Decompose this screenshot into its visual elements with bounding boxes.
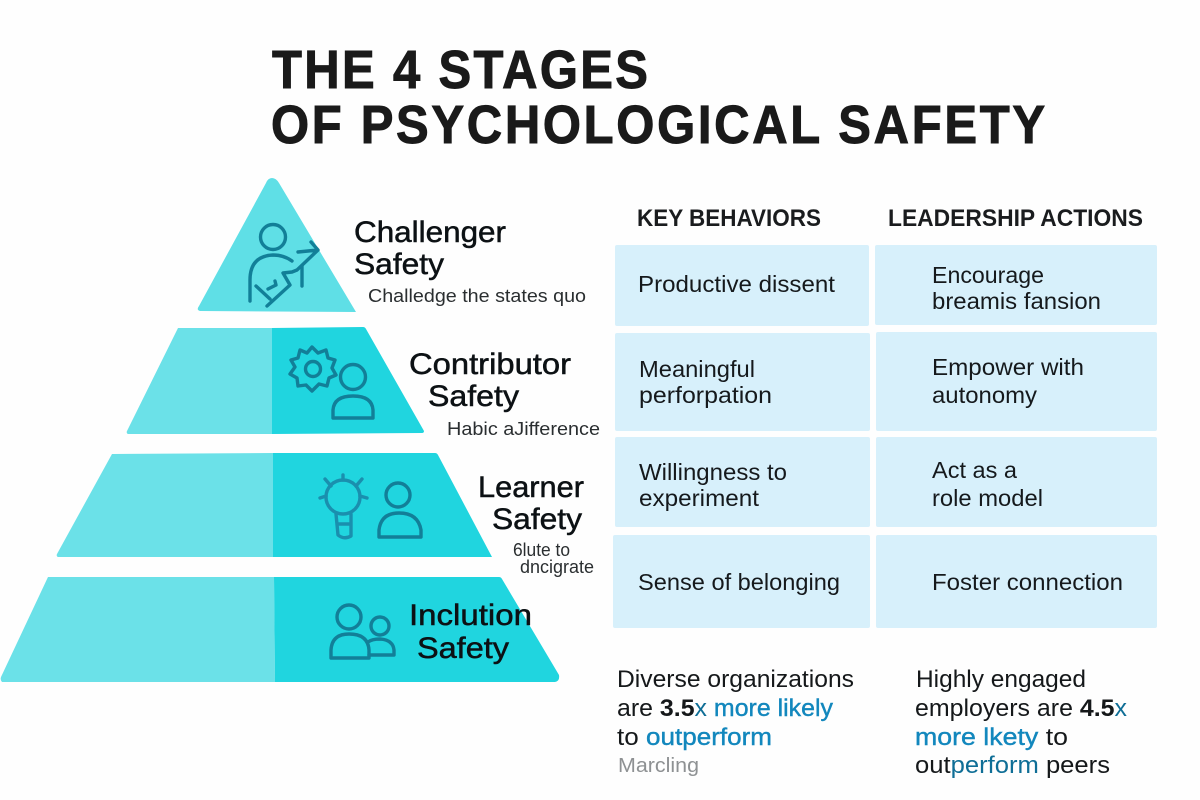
stat: diverse organizations: Marcling — [618, 755, 699, 777]
label: contributor safety: Safety — [428, 380, 519, 413]
cell: meaningful: Meaningful — [639, 356, 755, 382]
label: learner safety: Safety — [492, 503, 582, 536]
stat: diverse organizations — [617, 666, 854, 777]
stat: highly engaged employers: employers are 4.5x — [915, 695, 1127, 722]
cell: connection: Foster connection — [932, 569, 1123, 595]
cell: empower — [876, 332, 1157, 431]
cell: encourage: Encourage — [932, 262, 1044, 288]
tier: challenger safety — [198, 178, 356, 312]
icon: light bulb and person — [320, 475, 421, 538]
label: challenger safety — [354, 216, 586, 306]
column heading: key behaviors: KEY BEHAVIORS — [637, 205, 821, 232]
stat: highly engaged employers: Highly engaged — [916, 666, 1086, 693]
cell: belonging: Sense of belonging — [638, 569, 840, 595]
cell: encourage: breamis fansion — [932, 288, 1101, 314]
cell: belonging — [613, 535, 870, 628]
label: inclusion safety: Inclution — [409, 599, 532, 632]
label: contributor safety: Habic aJifference — [447, 419, 600, 439]
stat: highly engaged employers: outperform peers — [915, 752, 1110, 779]
cell: willingness — [615, 437, 870, 527]
title: OF PSYCHOLOGICAL SAFETY — [271, 95, 1045, 154]
icon: gear and person — [290, 347, 373, 418]
stat: highly engaged employers — [915, 666, 1127, 779]
icon: two people — [331, 605, 394, 658]
table: behaviors and actions — [613, 245, 1157, 628]
cell: role model: role model — [932, 485, 1043, 511]
label: learner safety: dncigrate — [520, 557, 594, 577]
cell: empower: autonomy — [932, 382, 1037, 408]
cell: meaningful — [615, 333, 870, 431]
cell: role model — [876, 437, 1157, 527]
label: inclusion safety — [409, 599, 532, 665]
title: THE 4 STAGES — [272, 40, 648, 99]
tier: learner safety — [57, 453, 492, 557]
cell: role model: Act as a — [932, 457, 1018, 483]
label: inclusion safety: Safety — [417, 632, 509, 665]
label: contributor safety — [409, 348, 600, 439]
stat: diverse organizations: to outperform — [617, 724, 772, 751]
cell: connection — [876, 535, 1157, 628]
cell: empower: Empower with — [932, 354, 1084, 380]
icon: challenger person with arrow — [250, 224, 318, 306]
label: challenger safety: Challenger — [354, 216, 506, 249]
label: learner safety — [478, 471, 594, 577]
cell: productive dissent — [615, 245, 869, 326]
tier: contributor safety — [127, 327, 424, 434]
label: contributor safety: Contributor — [409, 348, 571, 381]
cell: willingness: Willingness to — [639, 459, 787, 485]
cell: productive dissent: Productive dissent — [638, 271, 835, 297]
column heading: leadership actions: LEADERSHIP ACTIONS — [888, 205, 1143, 232]
label: learner safety: Learner — [478, 471, 584, 504]
stat: highly engaged employers: more lkety to — [915, 724, 1068, 751]
pyramid — [1, 178, 559, 682]
stat: diverse organizations: are 3.5x more likely — [617, 695, 834, 722]
label: learner safety: 6lute to — [513, 540, 570, 560]
label: challenger safety: Challedge the states quo — [368, 286, 586, 306]
stat: diverse organizations: Diverse organizations — [617, 666, 854, 693]
cell: meaningful: perforpation — [639, 382, 772, 408]
label: challenger safety: Safety — [354, 248, 444, 281]
tier: inclusion safety — [1, 577, 559, 682]
cell: willingness: experiment — [639, 485, 759, 511]
title — [271, 40, 1045, 154]
cell: encourage — [875, 245, 1157, 325]
